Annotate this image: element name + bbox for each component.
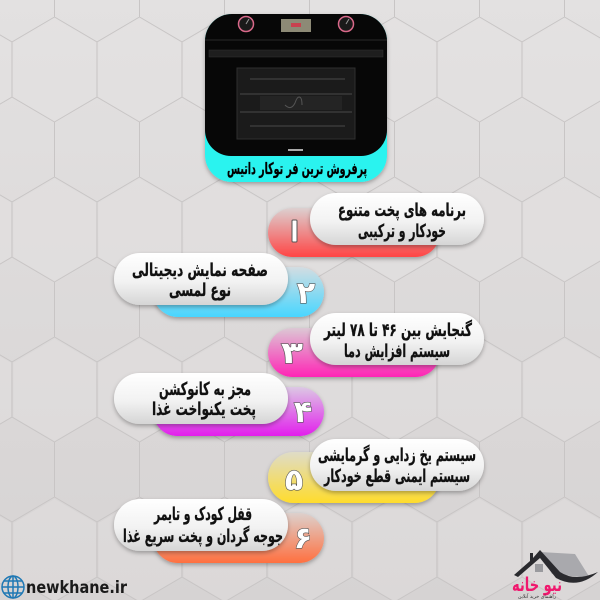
- text 3: گنجایش بین ۴۶ تا ۷۸ لیتر: [323, 319, 472, 341]
- text 4: پخت یکنواخت غذا: [152, 399, 256, 420]
- text 2: صفحه نمایش دیجیتالی: [132, 260, 268, 281]
- number 3: ۳: [281, 336, 303, 371]
- item 3: [268, 313, 484, 377]
- text pill 5: [310, 439, 484, 491]
- text 2: نوع لمسی: [169, 280, 231, 301]
- brand mark: [288, 149, 303, 151]
- text 1: خودکار و ترکیبی: [358, 221, 446, 242]
- item 4: [114, 373, 324, 436]
- color tab 1: [268, 208, 440, 257]
- number 5: ۵: [285, 463, 303, 498]
- number 2: ۲: [297, 276, 315, 311]
- text pill 6: [114, 499, 288, 551]
- left knob: [238, 16, 254, 32]
- text 5: سیستم یخ زدایی و گرمایشی: [318, 444, 476, 466]
- logo wordmark: نیو خانه: [512, 574, 562, 596]
- item 5: [268, 439, 484, 503]
- door handle: [209, 50, 383, 57]
- number 6: ۶: [294, 521, 312, 556]
- item 2: [114, 253, 324, 317]
- text 6: جوجه گردان و پخت سریع غذا: [123, 525, 283, 547]
- card title: پرفروش ترین فر توکار داتیس: [227, 159, 367, 179]
- item 1: [268, 193, 484, 257]
- logo tagline: راهنمای خرید آنلاین: [518, 593, 557, 600]
- oven window: [237, 68, 355, 139]
- color tab 6: [153, 513, 324, 563]
- color tab 5: [268, 452, 440, 503]
- text 6: قفل کودک و تایمر: [153, 504, 252, 525]
- text pill 4: [114, 373, 288, 424]
- logo: newkhane: [512, 550, 598, 600]
- right knob: [338, 16, 354, 32]
- item 6: [114, 499, 324, 563]
- text 2: [132, 260, 268, 301]
- oven body: [205, 14, 387, 156]
- number 4: ۴: [294, 395, 312, 430]
- text pill 3: [310, 313, 484, 365]
- text 1: [338, 200, 466, 242]
- text 3: [323, 319, 472, 362]
- color tab 2: [153, 267, 324, 317]
- text pill 1: [310, 193, 484, 245]
- color tab 4: [153, 387, 324, 436]
- icon: house roof: [514, 550, 598, 583]
- text 4: [152, 379, 256, 420]
- text 6: [123, 504, 283, 547]
- text pill 2: [114, 253, 288, 305]
- website footer: [2, 576, 128, 598]
- website address: newkhane.ir: [26, 578, 128, 598]
- icon: globe: [2, 576, 24, 598]
- display: [281, 19, 311, 32]
- text 3: سیستم افزایش دما: [344, 341, 450, 362]
- card base: [205, 14, 387, 182]
- product card: built-in oven: [205, 14, 387, 182]
- number 1: [292, 220, 297, 242]
- text 5: [318, 444, 476, 487]
- text 1: برنامه های پخت متنوع: [338, 200, 466, 221]
- text 5: سیستم ایمنی قطع خودکار: [323, 466, 470, 487]
- color tab 3: [268, 328, 440, 377]
- text 4: مجز به کانوکشن: [159, 379, 251, 400]
